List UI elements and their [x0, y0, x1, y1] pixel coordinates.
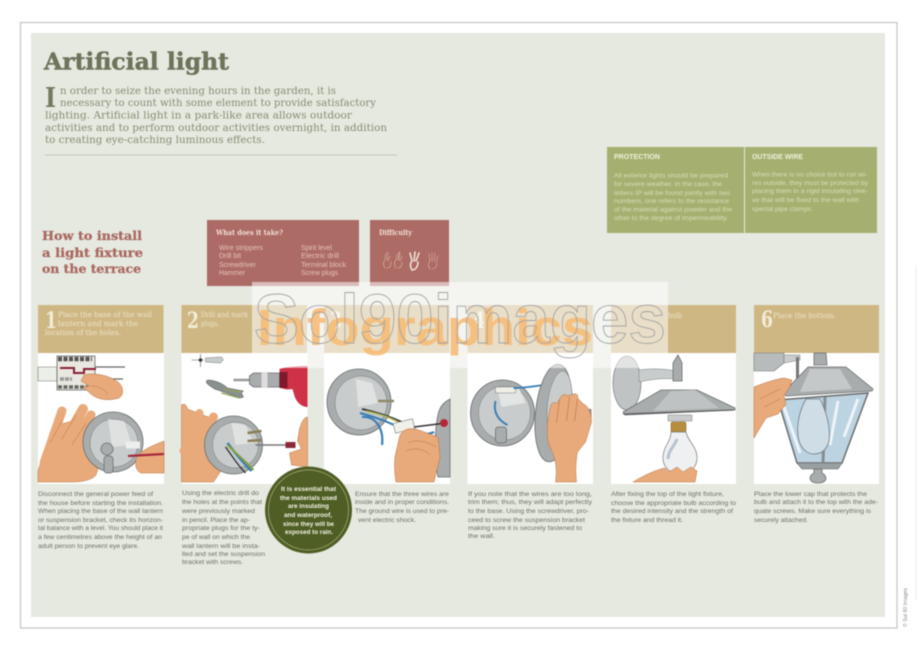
watermark: Sol90images Infographics: Sol90images: [254, 280, 666, 358]
tools list: Electric drill: [301, 253, 339, 260]
tools list: Spirit level: [301, 245, 332, 252]
step 1 header: location of the holes.: [45, 328, 121, 337]
section heading: how to install: on the terrace: [42, 261, 141, 276]
intro text block: activities and to perform outdoor activities overnight, in addition: [45, 123, 388, 134]
panel: what does it take: [207, 220, 359, 286]
outside wire heading: OUTSIDE WIRE: [752, 154, 803, 161]
step 6 caption: Place the lower cap that protects the: [754, 491, 867, 498]
step 1 caption: adult person to prevent eye glare.: [38, 543, 139, 550]
step 2 caption: lled and set the suspension: [182, 551, 265, 558]
step 5 header: bulb: [668, 311, 682, 320]
step 4: [468, 305, 593, 484]
step 4 caption: ceed to screw the suspension bracket: [468, 517, 585, 524]
outside wire text: placing them in a rigid insulating slee-: [752, 189, 868, 195]
step 1 caption: tal balance with a level. You should place it: [38, 525, 163, 532]
watermark: Sol90images Infographics: Infographics: [257, 299, 593, 356]
step 1 caption: the house before starting the installation.: [38, 500, 163, 507]
step 1 caption: When placing the base of the wall lantern: [38, 508, 163, 515]
section heading: how to install: a light fixture: [42, 245, 143, 260]
step 4 header: 4: [473, 308, 485, 334]
step 5 caption: After fixing the top of the light fixture,: [611, 491, 724, 498]
callout: materials warning: and waterproof,: [284, 512, 332, 519]
step 2 caption: pe of wall on which the: [182, 534, 250, 541]
intro text block: I: [45, 83, 56, 114]
step 4 caption: trim them; thus, they will adapt perfectly: [468, 499, 593, 506]
step 2 caption: were previously marked: [181, 508, 255, 515]
step 5 caption: [611, 491, 736, 524]
illustration: marking the holes: [38, 353, 164, 484]
panel: difficulty: [370, 220, 449, 286]
panel: protection: [607, 147, 744, 233]
callout: materials warning: [265, 466, 352, 554]
panel: outside wire: [745, 147, 877, 233]
step 6 header: [754, 305, 879, 353]
step 3 caption: vent electric shock.: [358, 517, 416, 524]
outside wire text: special pipe clamps.: [752, 207, 813, 213]
copyright credit: © Sol 90 Images: [902, 587, 909, 627]
step 1 header: [38, 305, 164, 353]
step 2 caption: Using the electric drill do: [182, 490, 259, 497]
callout: materials warning: exposed to rain.: [285, 529, 333, 536]
illustration: fitting the bulb: [611, 353, 736, 484]
callout: materials warning: since they will be: [283, 521, 334, 528]
step 1 caption: or suspension bracket, check its horizon-: [38, 517, 163, 524]
protection text: other to the degree of impermeability.: [614, 216, 728, 222]
step 5 caption: the fixture and thread it.: [611, 517, 683, 524]
tools list: [219, 245, 346, 277]
callout: materials warning: It is essential that: [281, 486, 337, 493]
step 6: [754, 305, 879, 484]
step 4 caption: to the base. Using the screwdriver, pro-: [468, 508, 589, 515]
protection heading: PROTECTION: [614, 154, 660, 161]
step 2 header: 2: [187, 308, 199, 334]
step 2 caption: the holes at the points that: [182, 499, 262, 506]
step 2: [182, 305, 308, 484]
illustration: assembled lantern: [754, 353, 879, 484]
illustration: screwing the bracket: [468, 353, 593, 484]
step 5: [611, 305, 736, 484]
outside wire text: ve that will be fixed to the wall with: [752, 198, 859, 204]
step 6 header: 6: [761, 307, 773, 333]
tools list: Hammer: [219, 270, 246, 277]
step 6 caption: securely attached.: [754, 517, 808, 524]
protection text: letters IP will be found jointly with two: [614, 191, 731, 197]
protection text: of the material against powder and the: [614, 208, 733, 214]
outside wire text: [752, 172, 868, 213]
step 4 caption: the wall.: [468, 533, 495, 540]
step 1 caption: [38, 491, 163, 550]
step 2 caption: wall lantern will be insta-: [181, 543, 260, 550]
step 2 caption: propriate plugs for the ty-: [182, 525, 260, 532]
step 2 caption: in pencil. Place the ap-: [182, 517, 250, 524]
outside wire text: When there is no choice but to run wi-: [752, 172, 867, 178]
tools heading: What does it take?: [215, 228, 283, 237]
step 4 header: [468, 305, 593, 353]
step 1: [38, 305, 164, 484]
step 2 caption: [181, 490, 265, 566]
tools list: Screw plugs: [301, 270, 338, 277]
tools list: Screwdriver: [219, 262, 257, 269]
step 4 caption: making sure it is securely fastened to: [468, 525, 582, 532]
step 3 caption: inside and in proper conditions.: [355, 499, 449, 506]
protection text: for severe weather. In the case, the: [614, 182, 723, 188]
protection text: numbers, one refers to the resistance: [614, 199, 730, 205]
intro text block: to creating eye-catching luminous effects.: [45, 135, 265, 146]
step 2 header: plugs.: [201, 319, 219, 328]
step 4 caption: [468, 491, 593, 540]
outside wire text: res outside, they must be protected by: [752, 181, 868, 187]
step 1 header: Place the base of the wall: [58, 310, 153, 319]
step 1 header: lantern and mark the: [58, 319, 139, 328]
step 5 header: [611, 305, 736, 353]
step 3 caption: [355, 491, 449, 524]
step 3 header: [324, 305, 450, 353]
illustration: drilling: [182, 353, 308, 484]
intro text block: [45, 83, 388, 146]
tools list: Terminal block: [301, 262, 346, 269]
intro text block: necessary to count with some element to provide satisfactory: [60, 98, 376, 109]
step 3: [324, 305, 450, 484]
step 2 header: Drill and mark: [201, 310, 248, 319]
callout: materials warning: the materials used: [280, 495, 337, 502]
difficulty hand icons: [384, 252, 438, 270]
section heading: how to install: [42, 228, 143, 276]
intro text block: n order to seize the evening hours in the garden, it is: [60, 86, 336, 97]
step 3 caption: The ground wire is used to pre-: [355, 508, 449, 515]
protection text: [614, 174, 733, 222]
step 6 caption: bulb and attach it to the top with the ade-: [754, 499, 878, 506]
step 1 caption: Disconnect the general power feed of: [38, 491, 153, 498]
intro text block: lighting. Artificial light in a park-like area allows outdoor: [45, 110, 352, 122]
tools list: Wire strippers: [219, 245, 263, 252]
step 2 header: [182, 305, 307, 353]
step 5 caption: the desired intensity and the strength of: [611, 508, 733, 515]
title: Artificial light: [43, 48, 229, 76]
step 6 caption: quate screws. Make sure everything is: [754, 508, 871, 515]
step 6 caption: [754, 491, 878, 524]
section heading: how to install: How to install: [42, 228, 142, 243]
protection text: All exterior lights should be prepared: [614, 174, 728, 180]
callout: materials warning: are insulating: [288, 503, 329, 510]
step 4 caption: If you note that the wires are too long,: [468, 491, 592, 498]
step 2 caption: bracket with screws.: [182, 559, 243, 566]
step 6 header: Place the bottom.: [773, 311, 836, 320]
tools list: Drill bit: [219, 253, 241, 260]
step 5 caption: choose the appropriate bulb according to: [611, 500, 736, 507]
illustration: checking wires: [324, 353, 450, 484]
step 1 caption: a few centimetres above the height of an: [38, 534, 162, 541]
difficulty heading: Difficulty: [379, 228, 413, 237]
step 3 header: 3: [330, 308, 342, 334]
step 1 header: 1: [45, 308, 57, 334]
step 3 caption: Ensure that the three wires are: [355, 491, 449, 498]
